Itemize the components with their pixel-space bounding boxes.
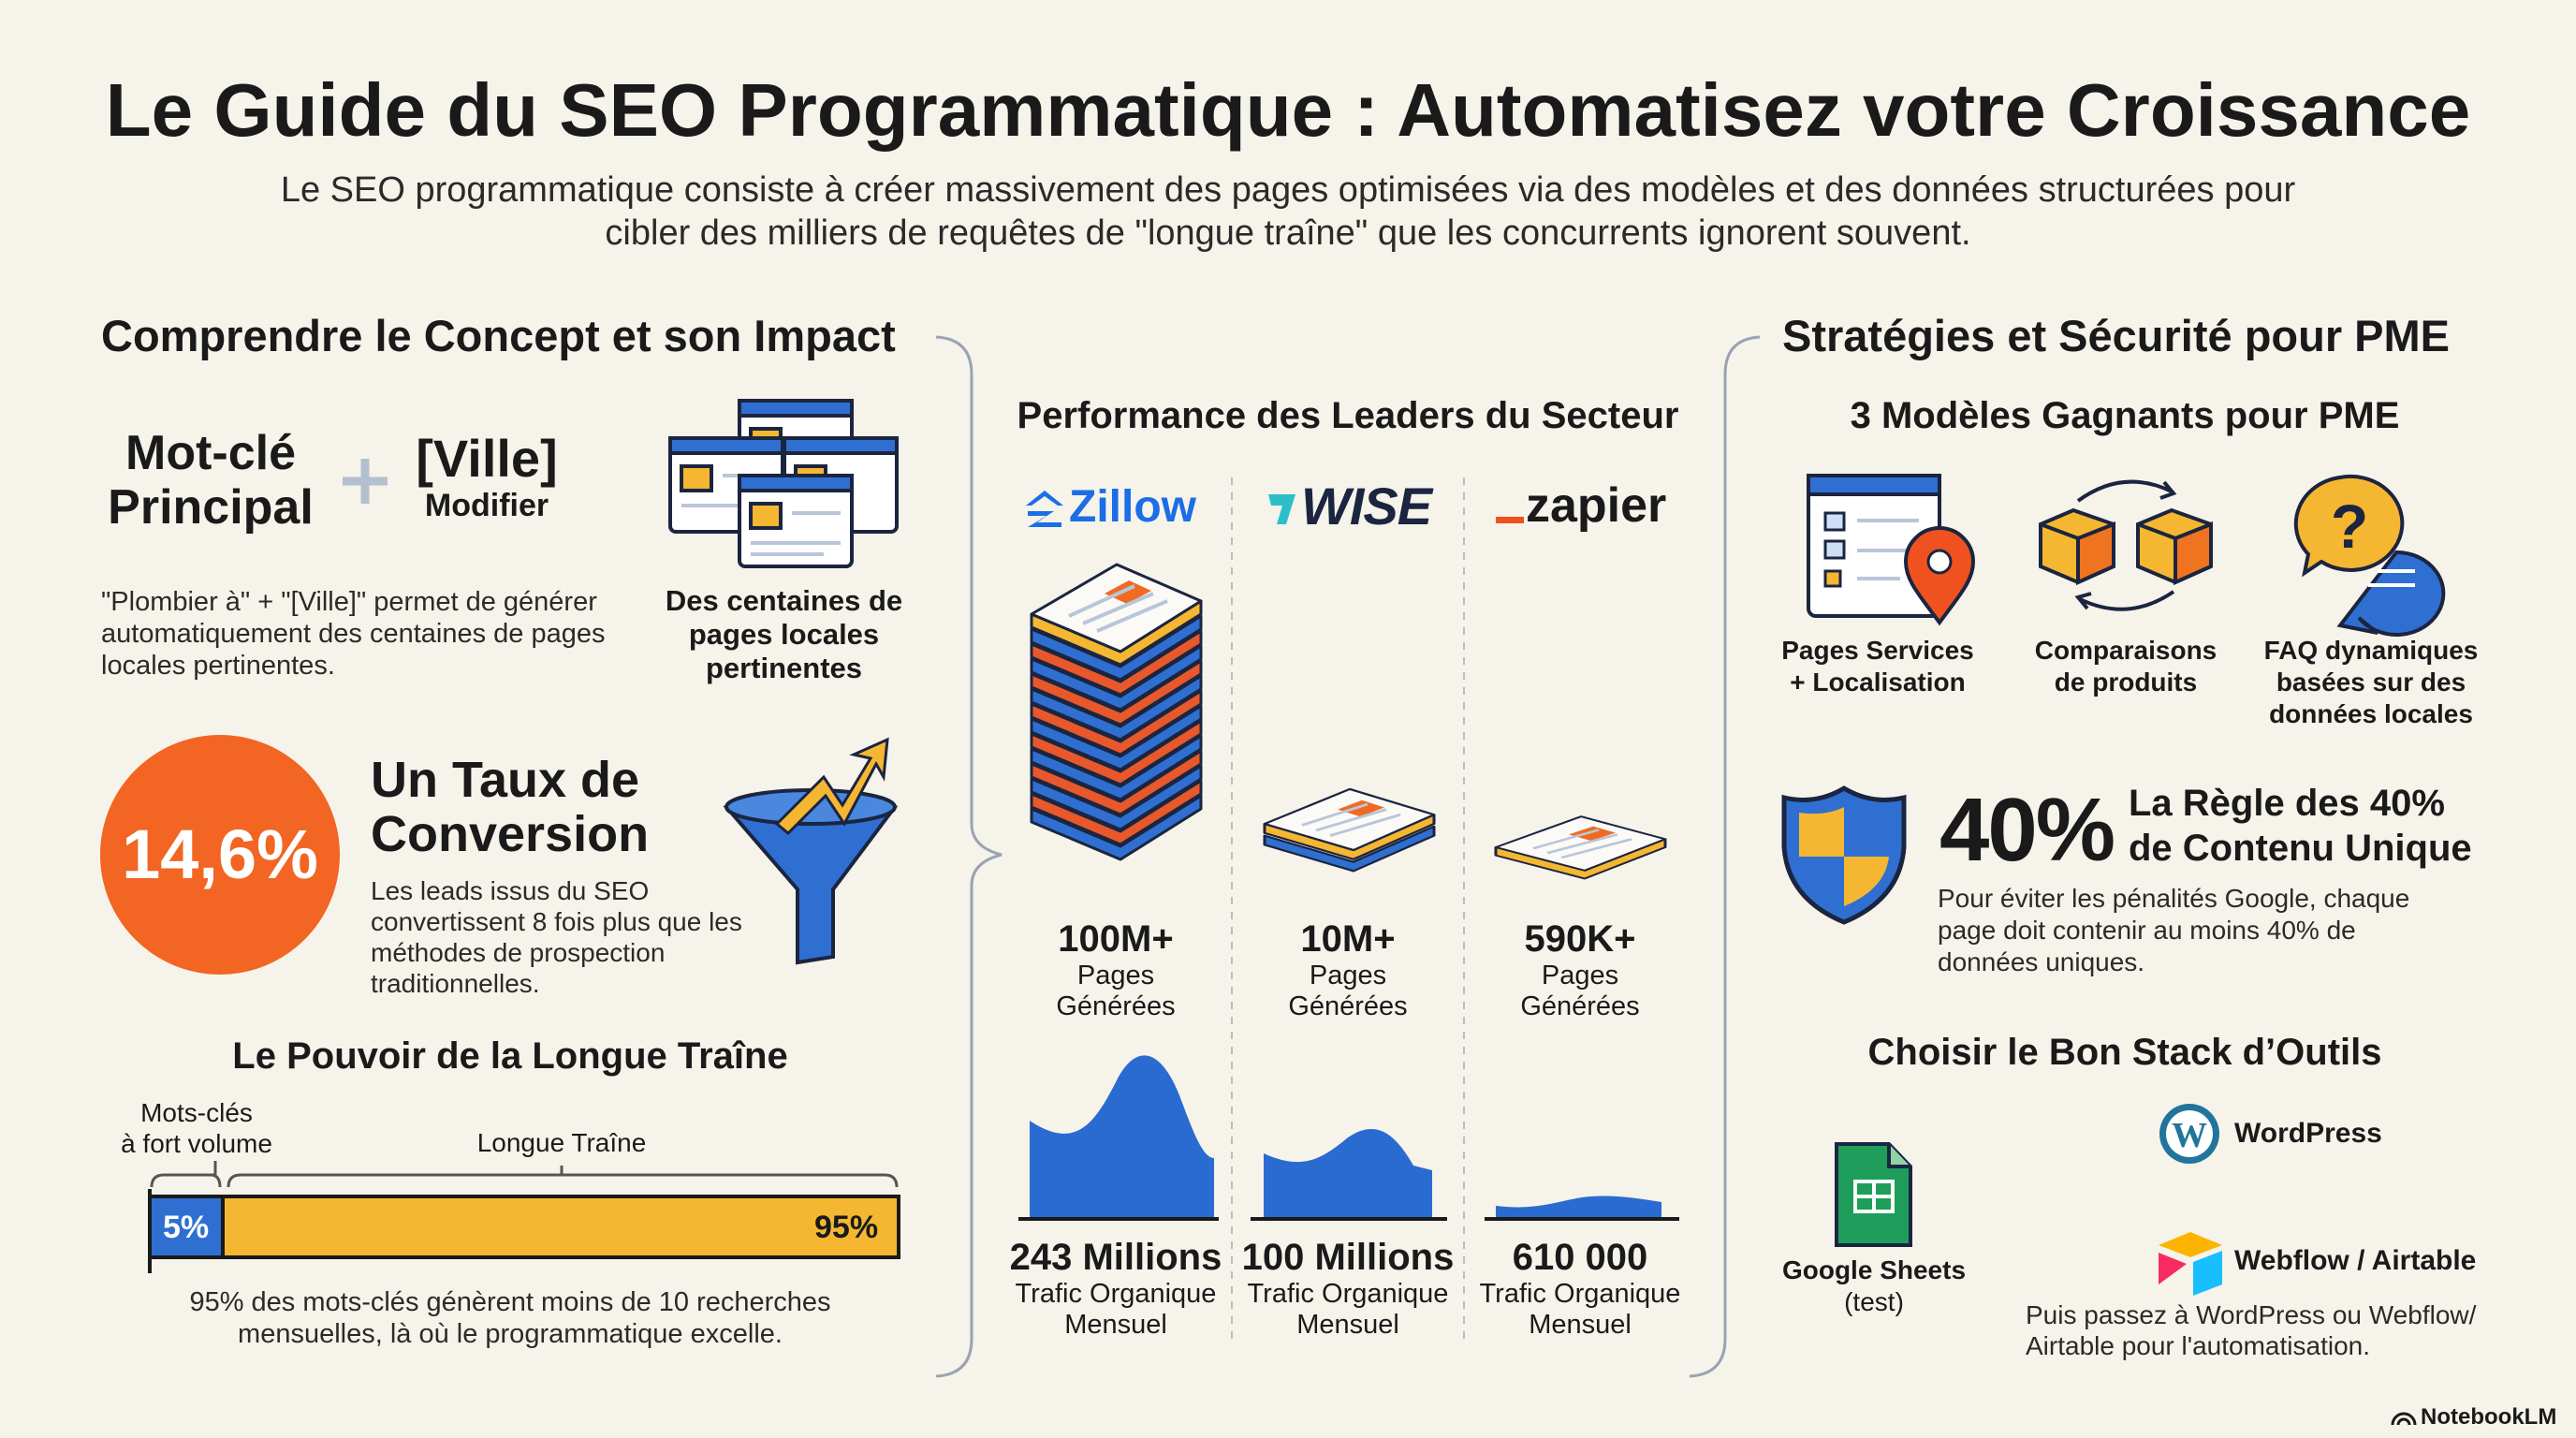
text: example: automatiquement des centaines de pages (101, 619, 605, 649)
text: tool caption: Airtable pour l'automatisation. (2026, 1331, 2370, 1360)
label: model 1: + Localisation (1790, 668, 1966, 697)
stat: zillow pages: Générées (1056, 991, 1176, 1021)
subtitle: Le SEO programmatique consiste à créer massivement des pages optimisées via des modèles et des données structurées pour (281, 170, 2295, 210)
label: model 3 (2264, 636, 2478, 728)
text: 95% (814, 1210, 878, 1245)
text: conversion: Les leads issus du SEO (371, 876, 649, 905)
formula: modifier: [Ville] (416, 429, 558, 488)
stat: zillow traffic (1010, 1237, 1222, 1340)
text: example: "Plombier à" + "[Ville]" permet de générer (101, 587, 597, 617)
icon: google sheets (1837, 1144, 1910, 1245)
formula: keyword (108, 426, 314, 535)
title: Le Guide du SEO Programmatique : Automatisez votre Croissance (106, 68, 2470, 152)
stat: 40%: 40% (1939, 780, 2114, 880)
logo: zillow: Zillow (1069, 482, 1196, 532)
icon: shield (1784, 788, 1904, 922)
stat: wise pages: 10M+ (1300, 918, 1396, 960)
heading: 40% rule: La Règle des 40% (2129, 783, 2445, 824)
stat: zillow pages: Pages (1077, 961, 1154, 990)
stat: zillow pages (1056, 918, 1176, 1021)
text: conversion: méthodes de prospection (371, 938, 665, 967)
text: example (101, 587, 605, 681)
heading: tool stack: Choisir le Bon Stack d’Outils (1868, 1032, 2381, 1073)
stat: zapier pages (1520, 918, 1640, 1021)
heading: left section: Comprendre le Concept et son Impact (101, 311, 896, 360)
label: google sheets (1782, 1255, 1966, 1316)
text: 40% rule: données uniques. (1938, 947, 2144, 976)
stat: zapier pages: Générées (1520, 991, 1640, 1021)
heading: right section: Stratégies et Sécurité pour PME (1782, 311, 2450, 360)
orange circle (100, 735, 340, 975)
text: pages caption: Des centaines de (666, 584, 902, 617)
zillow logo mark (1026, 491, 1063, 527)
heading: 40% rule (2129, 783, 2472, 869)
heading: conversion (371, 752, 649, 862)
label: wordpress: WordPress (2234, 1118, 2382, 1149)
label: model 1 (1781, 636, 1974, 697)
zapier logo mark (1496, 517, 1524, 523)
stack: zillow (1032, 565, 1201, 859)
label: webflow: Webflow / Airtable (2234, 1245, 2476, 1276)
text: pages caption (666, 584, 902, 684)
text: conversion: convertissent 8 fois plus que les (371, 907, 742, 936)
formula: keyword: Principal (108, 480, 314, 535)
heading: long tail: Le Pouvoir de la Longue Traîne (232, 1035, 788, 1077)
stat: zillow traffic: Trafic Organique (1016, 1279, 1216, 1309)
stat: wise pages: Générées (1288, 991, 1408, 1021)
text: tool caption: Puis passez à WordPress ou Webflow/ (2026, 1300, 2476, 1329)
icon: FAQ bubbles (2296, 477, 2443, 635)
text: conversion: traditionnelles. (371, 969, 540, 998)
subtitle: cibler des milliers de requêtes de "longue traîne" que les concurrents ignorent souvent. (605, 213, 1971, 253)
label: model 2: de produits (2055, 668, 2197, 697)
plus sign (343, 459, 388, 504)
icon: product comparison (2041, 482, 2211, 609)
label: model 3: FAQ dynamiques (2264, 636, 2478, 665)
text: example: locales pertinentes. (101, 651, 335, 681)
text: pages caption: pertinentes (706, 652, 862, 684)
label: long tail: Longue Traîne (477, 1128, 646, 1157)
formula: modifier: Modifier (425, 488, 549, 523)
stat: zillow pages: 100M+ (1058, 918, 1174, 960)
icon: funnel (726, 740, 895, 962)
stack: wise (1265, 789, 1434, 871)
text: 40% rule (1938, 884, 2409, 976)
label: high volume: à fort volume (121, 1129, 272, 1158)
icon: wordpress: W (2172, 1116, 2207, 1155)
bar labels: 5% (163, 1210, 209, 1245)
heading: 3 models: 3 Modèles Gagnants pour PME (1851, 395, 2399, 436)
heading: conversion: Conversion (371, 806, 649, 862)
text: 40% rule: page doit contenir au moins 40% de (1938, 916, 2356, 945)
heading: performance: Performance des Leaders du Secteur (1017, 395, 1678, 436)
label: model 1: Pages Services (1781, 636, 1974, 665)
icon: airtable (2159, 1232, 2222, 1296)
formula: modifier (416, 429, 558, 523)
text: pages caption: pages locales (689, 618, 879, 651)
stat: wise traffic: Trafic Organique (1248, 1279, 1448, 1309)
stat: wise pages (1288, 918, 1408, 1021)
label: model 2: Comparaisons (2035, 636, 2217, 665)
stat: zapier pages: 590K+ (1524, 918, 1635, 960)
text: tool caption (2026, 1300, 2477, 1360)
stat: 14,6%: 14,6% (122, 815, 318, 893)
label: model 3: basées sur des (2276, 668, 2466, 697)
long tail bar (150, 1161, 899, 1273)
stat: zapier traffic: Mensuel (1529, 1310, 1632, 1340)
label: high volume: Mots-clés (140, 1098, 253, 1127)
stat: zapier traffic: Trafic Organique (1480, 1279, 1680, 1309)
icon: FAQ bubbles: ? (2331, 492, 2368, 561)
column dividers (1232, 477, 1464, 1339)
text: 40% rule: Pour éviter les pénalités Google, chaque (1938, 884, 2409, 913)
stat: wise traffic: 100 Millions (1242, 1237, 1454, 1278)
icon: service page with pin (1808, 476, 1973, 623)
icon: notebooklm (2393, 1414, 2415, 1425)
label: model 3: données locales (2269, 699, 2473, 728)
label: model 2 (2035, 636, 2217, 697)
icon: wordpress (2159, 1104, 2219, 1164)
logo: zapier: zapier (1526, 478, 1666, 533)
left brace (936, 337, 1002, 1376)
stat: zapier pages: Pages (1542, 961, 1618, 990)
label: google sheets: Google Sheets (1782, 1255, 1966, 1284)
label: google sheets: (test) (1844, 1287, 1904, 1316)
icon: pages (670, 401, 897, 566)
heading: conversion: Un Taux de (371, 752, 639, 808)
stat: zapier traffic: 610 000 (1513, 1237, 1647, 1278)
right brace (1690, 337, 1760, 1376)
caption: long tail (189, 1287, 831, 1349)
wise logo mark (1268, 494, 1295, 524)
label: high volume (121, 1098, 272, 1158)
stat: wise traffic: Mensuel (1296, 1310, 1399, 1340)
formula: keyword: Mot-clé (125, 426, 296, 480)
stat: wise traffic (1242, 1237, 1454, 1340)
heading: 40% rule: de Contenu Unique (2129, 828, 2472, 869)
text: conversion (371, 876, 742, 998)
caption: long tail: mensuelles, là où le programmatique excelle. (238, 1319, 783, 1349)
brand: notebooklm: NotebookLM (2421, 1404, 2556, 1430)
stat: wise pages: Pages (1310, 961, 1386, 990)
subtitle (281, 170, 2295, 253)
stat: zillow traffic: 243 Millions (1010, 1237, 1222, 1278)
logo: wise: WISE (1301, 477, 1431, 536)
stack: zapier (1496, 816, 1665, 878)
area charts (1030, 1055, 1661, 1219)
caption: long tail: 95% des mots-clés génèrent moins de 10 recherches (189, 1287, 831, 1317)
stat: zapier traffic (1480, 1237, 1680, 1340)
stat: zillow traffic: Mensuel (1064, 1310, 1167, 1340)
